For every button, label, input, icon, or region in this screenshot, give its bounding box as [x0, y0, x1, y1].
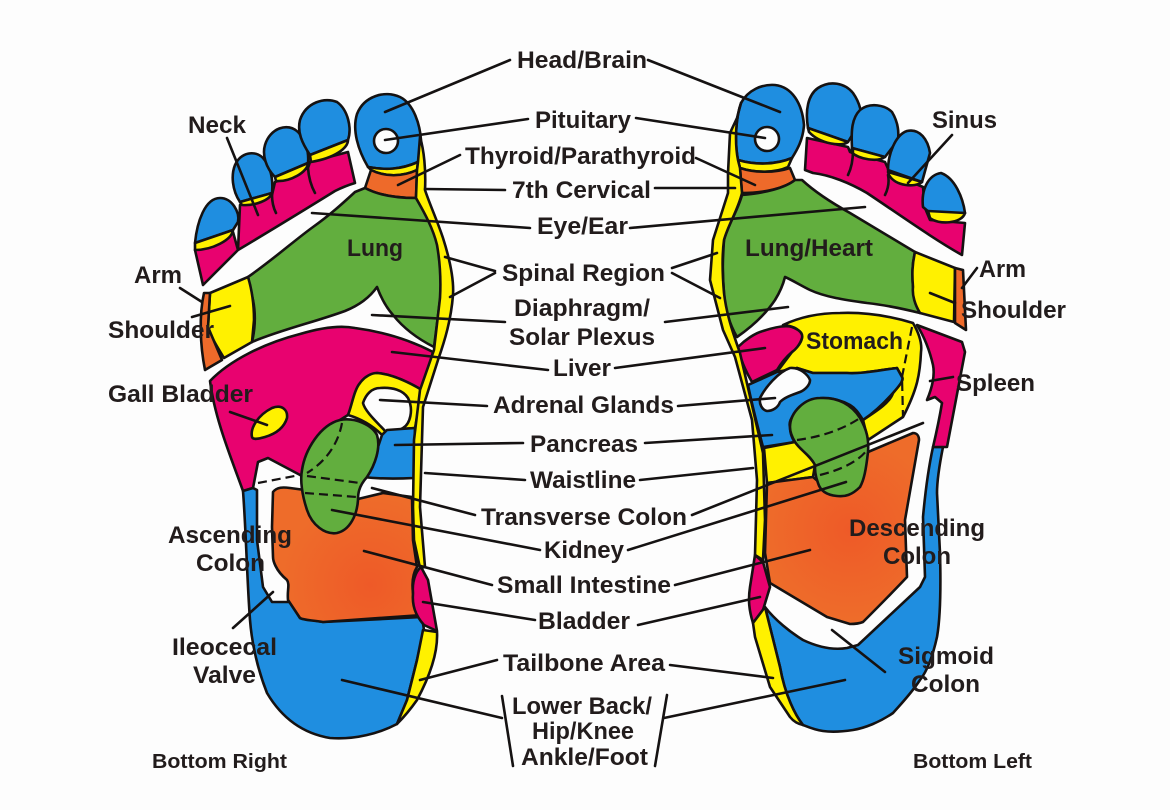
- pancreas area: [363, 428, 415, 479]
- big toe band: [368, 162, 418, 175]
- sinus band: fourth toe: [888, 172, 922, 185]
- spleen area: [917, 325, 965, 447]
- label: Bladder: Bladder: [538, 608, 630, 635]
- label: Gall Bladder: Gall Bladder: [108, 381, 253, 408]
- label: Tailbone Area: Tailbone Area: [503, 650, 666, 677]
- sinus band: second toe: [310, 140, 348, 162]
- label: Thyroid/Parathyroid: Thyroid/Parathyroid: [465, 143, 696, 170]
- sinus band: fourth toe: [240, 193, 272, 205]
- dashed colon lines: [258, 423, 360, 497]
- dashed colon lines: [797, 327, 912, 475]
- label: Kidney: Kidney: [544, 537, 625, 564]
- pituitary dot: [755, 127, 779, 151]
- liver area: [210, 327, 433, 491]
- label: Spleen: Spleen: [956, 370, 1035, 397]
- toe: little toe: [923, 173, 965, 213]
- sinus band: second toe: [808, 128, 848, 144]
- label: Sigmoid: Sigmoid: [898, 643, 994, 670]
- tailbone band: [753, 607, 803, 725]
- label: Bottom Left: Bottom Left: [913, 751, 1032, 773]
- toe: second toe: [807, 83, 861, 142]
- waist yellow area: [764, 442, 815, 483]
- label: Small Intestine: Small Intestine: [497, 572, 671, 599]
- spine band upper: [413, 137, 453, 568]
- stomach area: [777, 313, 921, 440]
- label: Pancreas: Pancreas: [530, 431, 638, 458]
- label: Eye/Ear: Eye/Ear: [537, 213, 628, 240]
- label: Pituitary: Pituitary: [535, 107, 632, 134]
- label: Bottom Right: Bottom Right: [152, 751, 287, 773]
- label: Head/Brain: Head/Brain: [517, 47, 647, 74]
- bladder area: [413, 567, 437, 631]
- label: Lower Back: Lower Back/: [512, 693, 652, 720]
- spine band: [710, 103, 765, 560]
- adrenal glands: [760, 368, 810, 411]
- toe: third toe: [264, 127, 308, 177]
- sinus band: little toe: [928, 211, 965, 222]
- sinus band: little toe: [195, 230, 233, 250]
- foot: bottom left: [710, 83, 966, 732]
- shoulder area: [208, 277, 254, 358]
- spine band lower: [397, 630, 437, 724]
- gall bladder: [252, 407, 287, 439]
- label: Adrenal Glands: Adrenal Glands: [493, 392, 674, 419]
- adrenal area: [348, 373, 422, 435]
- label: Transverse Colon: Transverse Colon: [481, 504, 687, 531]
- sinus band: third toe: [851, 148, 885, 160]
- label: Waistline: Waistline: [530, 467, 636, 494]
- toe pad: pink ball of toes: [195, 152, 355, 285]
- toe separators: [848, 150, 889, 195]
- label: Shoulder left: Shoulder: [108, 317, 214, 344]
- label: Colon (sigmoid): Colon: [911, 671, 980, 698]
- label: Lung: Lung: [347, 235, 403, 262]
- pancreas blue area: [748, 368, 903, 447]
- foot: bottom right: [195, 94, 453, 738]
- label: Spinal Region: Spinal Region: [502, 260, 665, 287]
- label: Valve: Valve: [193, 662, 256, 689]
- label: Arm right: Arm: [979, 256, 1026, 283]
- label: Diaphragm: Diaphragm/: [514, 295, 650, 322]
- toe: second toe: [299, 100, 350, 155]
- label: Ankle/Foot: Ankle/Foot: [521, 744, 648, 771]
- bladder area: [749, 555, 770, 623]
- pituitary dot: [374, 129, 398, 153]
- arm area: [201, 293, 222, 370]
- label: Solar Plexus: Solar Plexus: [509, 324, 655, 351]
- label: Hip/Knee: Hip/Knee: [532, 718, 634, 745]
- solar plexus pink area: [738, 326, 802, 382]
- label: Colon (ascending): Colon: [196, 550, 265, 577]
- thyroid area: [740, 168, 795, 193]
- label: Sinus: Sinus: [932, 107, 997, 134]
- shoulder area: [912, 252, 955, 322]
- toe: third toe: [852, 105, 898, 157]
- label: Neck: Neck: [188, 112, 247, 139]
- label: Ascending: Ascending: [168, 522, 292, 549]
- toe: fourth toe: [888, 131, 930, 182]
- label: Ileocecal: Ileocecal: [172, 634, 277, 661]
- big toe band: [738, 158, 792, 172]
- label: Liver: Liver: [553, 355, 611, 382]
- toe: little toe: [195, 198, 238, 243]
- label: 7th Cervical: 7th Cervical: [512, 177, 651, 204]
- lung area: [248, 188, 441, 347]
- pink ball of toes: [805, 138, 965, 255]
- toe: fourth toe: [233, 153, 272, 202]
- small intestine area: [765, 433, 919, 624]
- label: Lung/Heart: Lung/Heart: [745, 235, 873, 262]
- small intestine area: [272, 487, 422, 622]
- adrenal glands: [363, 388, 411, 432]
- toe separators: [272, 168, 315, 213]
- big toe: [355, 94, 421, 169]
- label: Shoulder right: Shoulder: [961, 297, 1066, 324]
- kidney: [790, 398, 868, 496]
- kidney: [301, 419, 378, 533]
- ascending colon strip: [243, 488, 424, 738]
- leader lines: [180, 60, 977, 766]
- label: Colon (descending): Colon: [883, 543, 951, 570]
- sinus band: third toe: [275, 163, 308, 181]
- label: Descending: Descending: [849, 515, 985, 542]
- lung and heart area: [723, 180, 920, 337]
- label: Stomach: Stomach: [806, 328, 903, 355]
- label: Arm left: Arm: [134, 262, 182, 289]
- arm area: [955, 268, 966, 330]
- descending colon heel: [765, 447, 943, 732]
- thyroid area: [365, 170, 417, 198]
- big toe: [736, 85, 804, 164]
